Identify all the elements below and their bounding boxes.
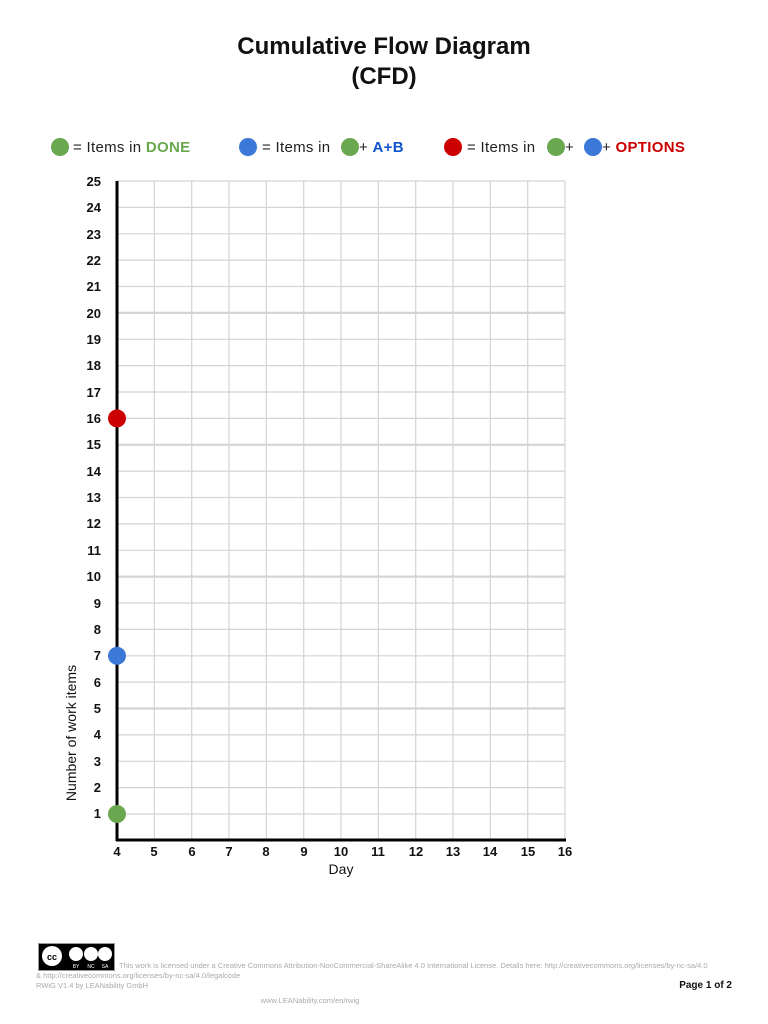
y axis labels: 7 [94,648,101,663]
footer: url: www.LEANability.com/en/rwig [261,996,359,1005]
y axis labels [87,174,102,821]
x axis labels: 6 [188,844,196,859]
legend item: options: + OPTIONS [602,139,685,156]
x axis labels: 8 [262,844,270,859]
y axis labels: 17 [87,385,101,400]
x axis labels: 10 [334,844,348,859]
y axis title: Number of work items [63,665,79,801]
y axis labels: 16 [87,411,101,426]
legend item: options: = Items in [467,139,535,156]
legend item: done: = Items in DONE [73,139,190,156]
legend item: A+B: + A+B [359,139,404,156]
legend item: A+B: = Items in [262,139,330,156]
x axis labels: 15 [521,844,535,859]
y axis labels: 13 [87,490,101,505]
x axis labels [113,844,572,859]
title [237,33,531,90]
y axis labels: 23 [87,227,101,242]
y axis labels: 10 [87,569,101,584]
y axis labels: 20 [87,306,101,321]
footer: cc badge: BY [73,964,80,970]
footer: page number: Page 1 of 2 [679,980,732,991]
footer: cc badge: NC [87,964,95,970]
y axis labels: 2 [94,780,101,795]
axes [116,181,566,841]
y axis labels: 22 [87,253,101,268]
x axis labels: 14 [483,844,498,859]
title: (CFD) [351,63,417,90]
legend item: options: + [565,139,574,156]
y axis labels: 3 [94,754,101,769]
footer: license text: This work is licensed under a Creative Commons Attribution-NonCommercial-ShareAlike 4.0 International License. Details here: http://creativecommons.org/licenses/by-nc-sa/4.0 [119,961,708,970]
footer: cc badge [38,943,115,971]
y axis labels: 24 [87,200,102,215]
y axis labels: 21 [87,279,101,294]
x axis labels: 13 [446,844,460,859]
footer: license text [36,961,708,990]
y axis labels: 11 [87,543,101,558]
legend item: options [444,138,685,156]
footer: cc badge: SA [102,964,109,970]
footer: license text: & http://creativecommons.org/licenses/by-nc-sa/4.0/legalcode [36,971,240,980]
x axis labels: 4 [113,844,121,859]
y axis labels: 5 [94,701,101,716]
x axis labels: 16 [558,844,572,859]
data points [108,409,126,823]
y axis labels: 14 [87,464,102,479]
footer: license text: RWiG V1.4 by LEANability GmbH [36,981,148,990]
y axis labels: 12 [87,516,101,531]
y axis labels: 19 [87,332,101,347]
x axis labels: 12 [409,844,423,859]
title: Cumulative Flow Diagram [237,33,531,60]
y axis labels: 8 [94,622,101,637]
x axis labels: 7 [225,844,233,859]
footer: cc badge: cc [47,952,57,962]
legend item: A+B [239,138,404,156]
y axis labels: 15 [87,437,101,452]
legend [51,138,685,156]
y axis labels: 18 [87,358,101,373]
y axis labels: 9 [94,596,101,611]
x axis labels: 11 [371,844,385,859]
y axis labels: 25 [87,174,101,189]
x axis labels: 5 [150,844,158,859]
x axis title: Day [329,861,353,877]
y axis labels: 6 [94,675,101,690]
y axis labels: 1 [94,806,101,821]
y axis labels: 4 [94,727,102,742]
x axis labels: 9 [300,844,308,859]
